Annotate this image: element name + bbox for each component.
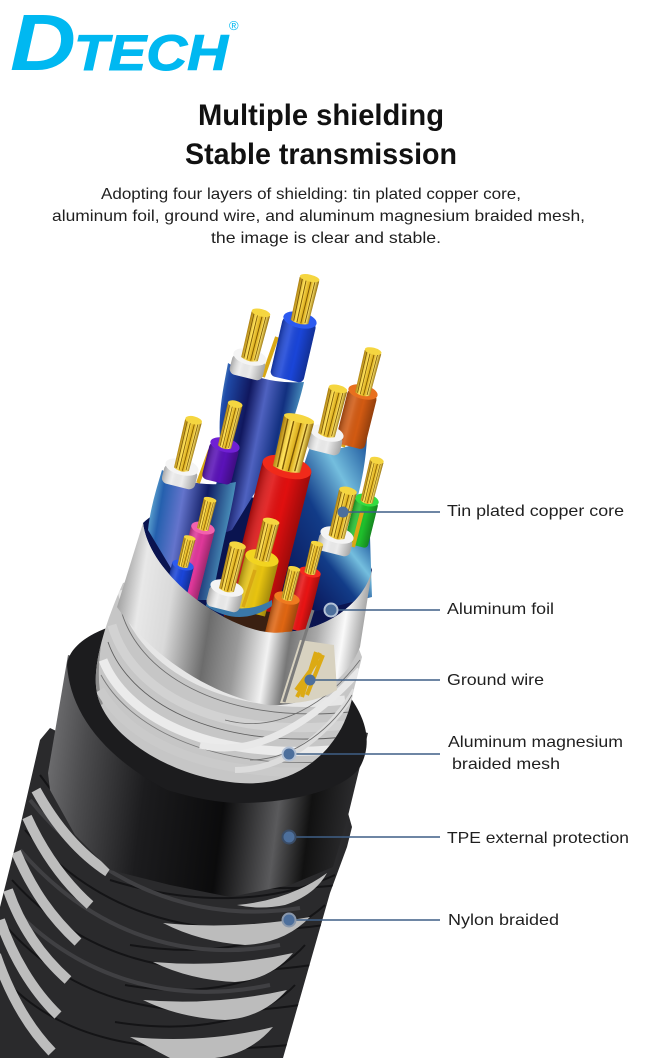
description text: the image is clear and stable. — [211, 230, 441, 247]
callout: aluminum foil: Aluminum foil — [447, 601, 554, 618]
nylon braided outer layer — [0, 720, 360, 1058]
description text: aluminum foil, ground wire, and aluminum magnesium braided mesh, — [52, 208, 585, 225]
title — [185, 99, 457, 171]
callout: TPE external protection — [282, 830, 629, 847]
drain wire — [263, 337, 277, 377]
description text — [52, 186, 585, 247]
callout: tin plated copper core: Tin plated copper core — [447, 503, 624, 520]
logo: DTECH: ® — [229, 18, 239, 33]
foil-wrapped pair: top — [205, 271, 327, 540]
large red wire — [222, 409, 324, 638]
foil-wrapped pair: right lower — [313, 454, 389, 612]
callout: TPE external protection: TPE external protection — [447, 830, 629, 847]
logo: DTECH — [10, 0, 239, 87]
callout: tin plated copper core — [338, 503, 624, 520]
callout: aluminum magnesium braided mesh: braided mesh — [452, 756, 560, 773]
aluminum foil front — [117, 523, 372, 705]
ground wire opening — [280, 610, 337, 703]
foil-wrapped pair: right upper — [283, 344, 389, 590]
title: Multiple shielding — [198, 99, 444, 132]
shield interior — [143, 496, 372, 633]
callout: nylon braided — [282, 912, 559, 929]
aluminum magnesium braided mesh — [96, 570, 362, 784]
TPE end ring — [67, 620, 367, 803]
title: Stable transmission — [185, 138, 457, 171]
callout: ground wire: Ground wire — [447, 672, 544, 689]
logo: DTECH: D — [10, 0, 76, 87]
TPE external jacket — [48, 655, 368, 897]
callout: aluminum magnesium braided mesh — [282, 734, 623, 773]
callout: ground wire — [304, 672, 544, 689]
callout: nylon braided: Nylon braided — [448, 912, 559, 929]
callout: aluminum foil — [324, 601, 554, 618]
description text: Adopting four layers of shielding: tin plated copper core, — [101, 186, 521, 203]
lower wires — [163, 494, 328, 645]
foil-wrapped pair: left — [148, 397, 251, 600]
logo: DTECH: TECH — [74, 25, 229, 81]
callout: aluminum magnesium braided mesh: Aluminum magnesium — [448, 734, 623, 751]
cable illustration — [0, 271, 389, 1058]
